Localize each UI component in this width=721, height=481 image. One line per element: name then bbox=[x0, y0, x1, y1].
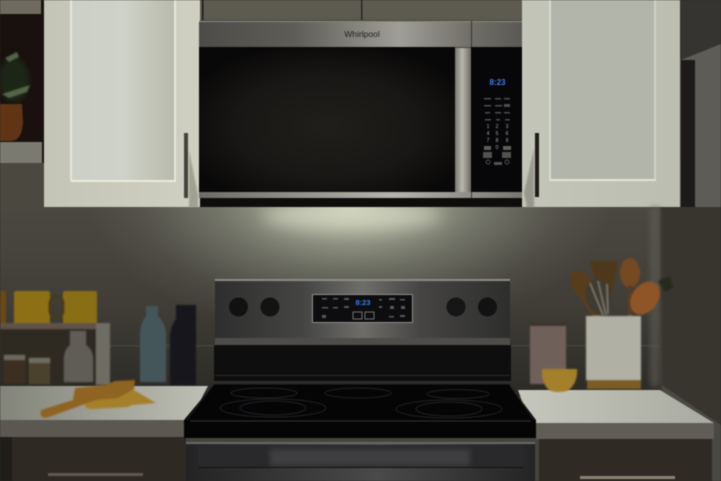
microwave underside bbox=[200, 197, 522, 207]
left cabinet handle bbox=[184, 133, 188, 198]
burners bbox=[220, 388, 502, 418]
keypad digits: 9 bbox=[506, 138, 509, 144]
right countertop bbox=[518, 390, 714, 481]
keypad digits: 1 bbox=[487, 124, 490, 130]
keypad digits: 2 bbox=[496, 124, 499, 130]
keypad digits bbox=[487, 124, 509, 151]
keypad digits: 8 bbox=[496, 138, 499, 144]
right cabinet handle bbox=[535, 133, 539, 197]
cabinet pull bbox=[48, 473, 143, 476]
lower cabinet left bbox=[0, 437, 186, 481]
refrigerator side bbox=[650, 0, 721, 481]
control panel with display: 8:23 bbox=[355, 298, 371, 307]
wooden spatula and towel bbox=[41, 380, 156, 418]
white utensil crock bbox=[586, 316, 641, 389]
over-the-range microwave bbox=[199, 21, 522, 207]
keypad digits: 5 bbox=[496, 131, 499, 137]
keypad digits: 6 bbox=[506, 131, 509, 137]
wall above microwave bbox=[200, 0, 522, 20]
left cabinet door bbox=[44, 0, 200, 207]
yellow bowl bbox=[542, 369, 577, 392]
open shelf with plant bbox=[0, 0, 44, 163]
left items on counter bbox=[0, 291, 196, 385]
range bbox=[184, 279, 536, 481]
range lower back bbox=[214, 345, 511, 381]
yellow mugs bbox=[0, 291, 97, 324]
clock display: 8:23 bbox=[489, 78, 506, 87]
black grinder bbox=[170, 305, 196, 385]
keypad digits: 3 bbox=[506, 124, 509, 130]
left countertop bbox=[0, 386, 208, 481]
keypad digits: 4 bbox=[487, 131, 490, 137]
control panel with display bbox=[312, 294, 413, 323]
range back panel bbox=[215, 279, 510, 345]
oven drawer bbox=[186, 442, 535, 481]
glass bottle bbox=[64, 331, 93, 382]
right cabinet door bbox=[522, 0, 680, 207]
blue grinder bbox=[140, 306, 166, 382]
keypad digits: 0 bbox=[496, 145, 499, 151]
canister bbox=[530, 323, 566, 384]
brand logo: Whirlpool bbox=[344, 29, 380, 39]
range hood light glow bbox=[262, 202, 442, 230]
lower cabinet right bbox=[539, 439, 712, 481]
spice jars bbox=[4, 355, 50, 384]
cabinet pull bbox=[580, 476, 675, 479]
keypad digits: 7 bbox=[487, 138, 490, 144]
door handle bbox=[455, 48, 471, 192]
cooktop bbox=[184, 384, 536, 438]
knobs bbox=[229, 298, 497, 316]
small shelf bbox=[0, 323, 110, 385]
bottom steel strip bbox=[199, 192, 522, 198]
control panel bbox=[471, 47, 522, 192]
steel top band bbox=[199, 21, 522, 47]
door glass bbox=[199, 47, 455, 192]
right items on counter bbox=[530, 258, 673, 389]
wooden utensils bbox=[571, 258, 673, 320]
